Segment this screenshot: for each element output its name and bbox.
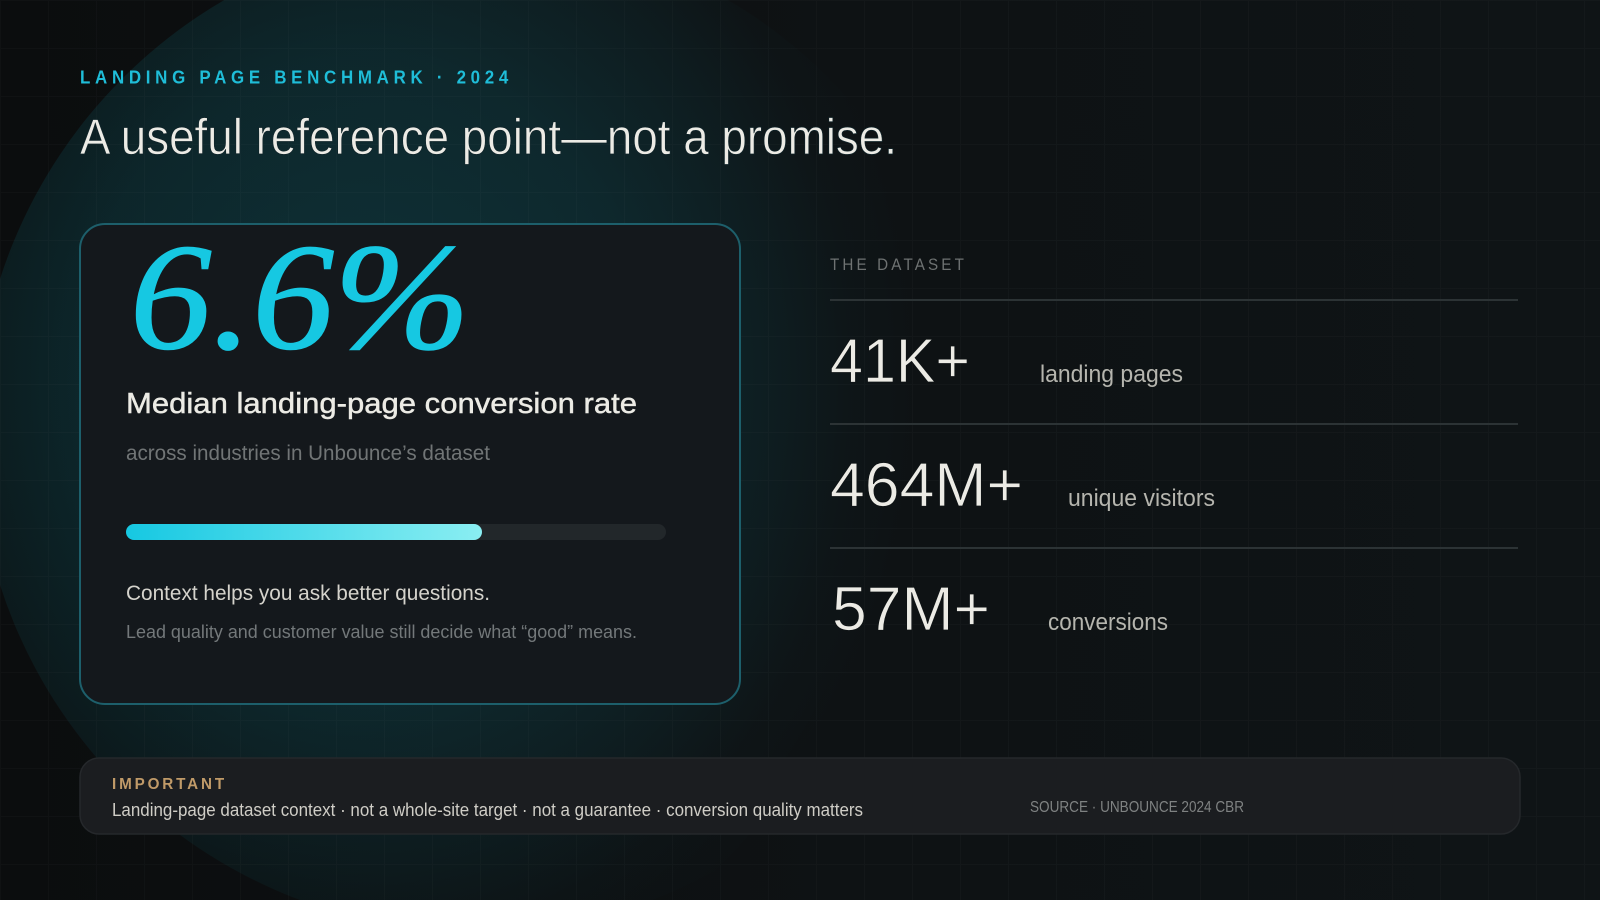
source: SOURCE · UNBOUNCE 2024 CBR bbox=[1030, 799, 1244, 816]
stat: landing pages bbox=[830, 327, 1183, 396]
stat: unique visitors: unique visitors bbox=[1068, 485, 1215, 512]
callout text: Landing-page dataset context · not a whole-site target · not a guarantee · conversion quality matters bbox=[112, 800, 863, 820]
panel: the dataset bbox=[830, 255, 1518, 644]
stat: landing pages: 41K+ bbox=[830, 327, 970, 396]
panel: median conversion rate bbox=[80, 213, 740, 704]
dataset heading: THE DATASET bbox=[830, 255, 967, 274]
card subheading: across industries in Unbounce’s dataset bbox=[126, 441, 490, 465]
progress bar bbox=[126, 524, 666, 540]
context line: Context helps you ask better questions. bbox=[126, 581, 490, 605]
stat: conversions: 57M+ bbox=[832, 575, 990, 644]
callout label: IMPORTANT bbox=[112, 776, 227, 793]
callout: important bbox=[80, 758, 1520, 834]
stat: unique visitors bbox=[830, 451, 1215, 520]
eyebrow: LANDING PAGE BENCHMARK · 2024 bbox=[80, 68, 513, 88]
title: A useful reference point—not a promise. bbox=[80, 109, 897, 165]
stat: conversions bbox=[832, 575, 1168, 644]
big number: 6.6% bbox=[130, 213, 470, 381]
card heading: Median landing-page conversion rate bbox=[126, 388, 637, 420]
stat: conversions: conversions bbox=[1048, 609, 1168, 636]
caveat line: Lead quality and customer value still decide what “good” means. bbox=[126, 622, 637, 642]
stat: unique visitors: 464M+ bbox=[830, 451, 1023, 520]
stat: landing pages: landing pages bbox=[1040, 361, 1183, 388]
